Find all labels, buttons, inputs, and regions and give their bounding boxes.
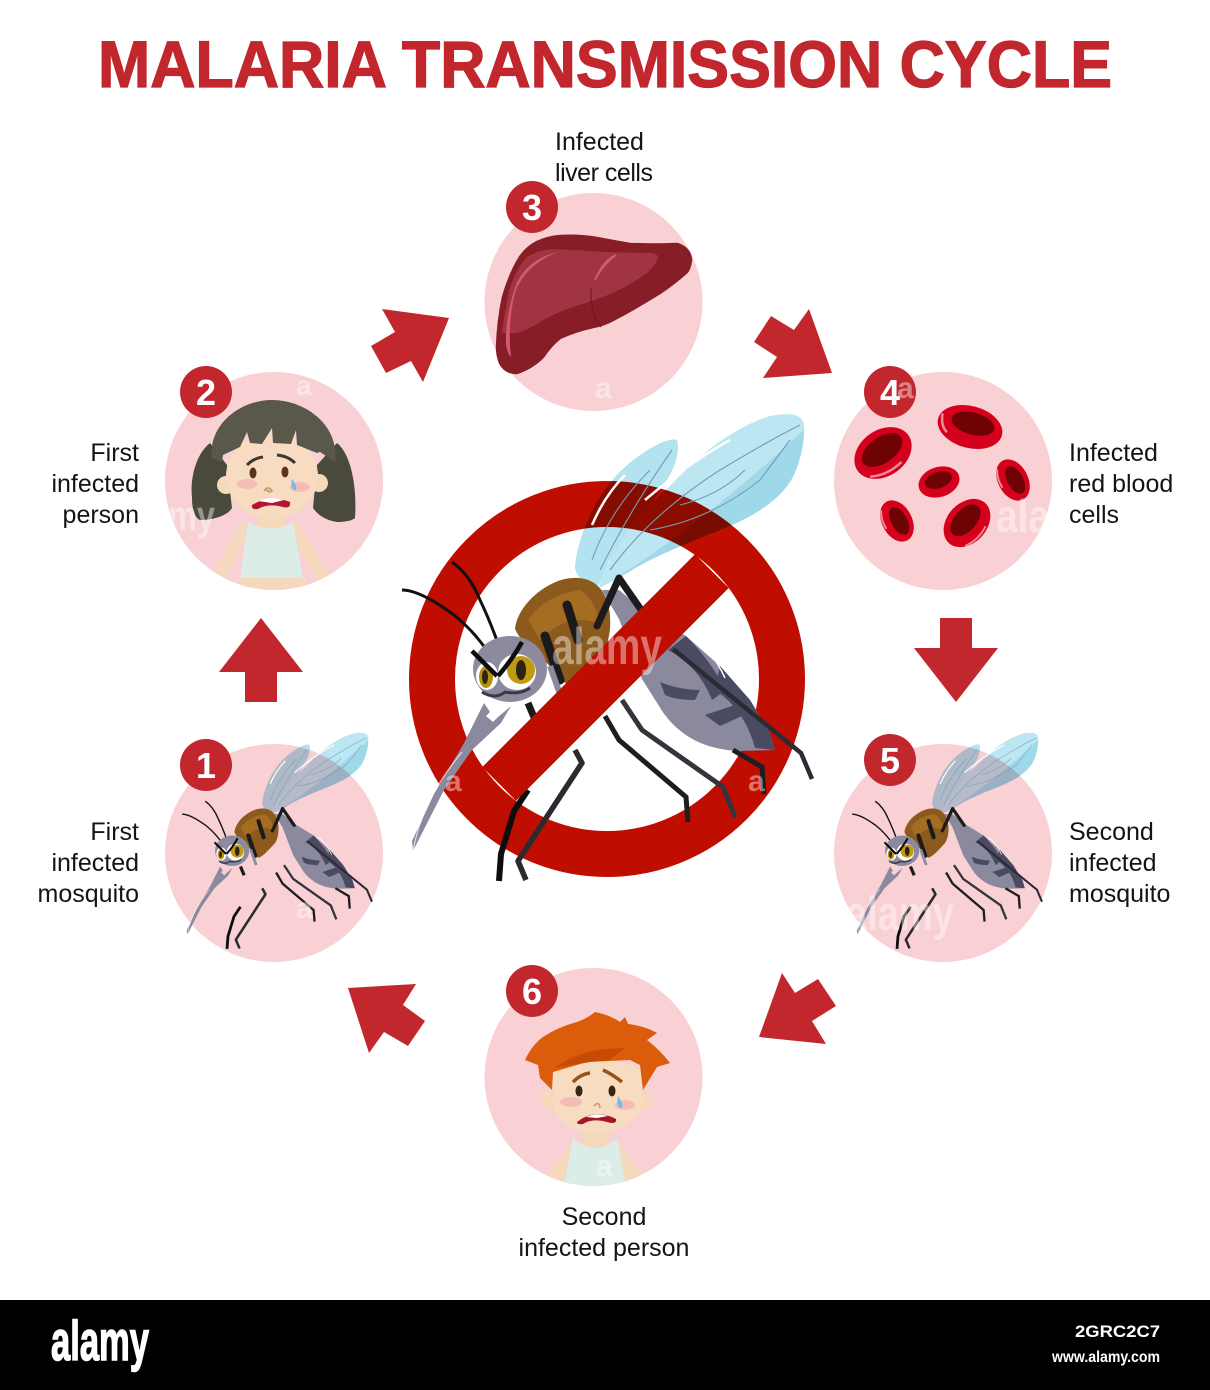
prohibition slash — [483, 555, 728, 800]
panel: step 6 second infected person — [484, 965, 702, 1190]
label: second infected person: infected person — [519, 1234, 689, 1262]
arrow: 1 to 2 — [219, 618, 303, 702]
icon: crying boy — [525, 1012, 670, 1190]
site url: www.alamy.com — [1051, 1349, 1160, 1366]
footer logo: alamy — [51, 1309, 149, 1372]
watermark: alamy — [552, 618, 662, 676]
badge 3: 3 — [522, 187, 542, 228]
panel: step 5 second infected mosquito — [834, 733, 1052, 962]
watermark: a — [445, 765, 462, 798]
badge 2: 2 — [196, 372, 216, 413]
label: second infected mosquito: infected — [1069, 849, 1157, 877]
label: infected red blood cells: cells — [1069, 501, 1119, 529]
arrow: 3 to 4 — [754, 309, 832, 378]
icon: large mosquito — [402, 414, 812, 881]
arrow: 5 to 6 — [759, 973, 836, 1044]
image id: 2GRC2C7 — [1075, 1322, 1160, 1341]
title: MALARIA TRANSMISSION CYCLE — [98, 27, 1112, 101]
icon: liver — [497, 236, 691, 405]
badge 4 — [864, 366, 916, 418]
no-entry ring — [432, 504, 782, 854]
badge 4: 4 — [880, 372, 900, 413]
icon: red blood cell — [844, 416, 922, 490]
icon: small mosquito 1 — [182, 733, 372, 949]
watermark: a — [296, 892, 313, 925]
label: second infected mosquito: Second — [1069, 818, 1154, 846]
label: first infected mosquito: infected — [51, 849, 139, 877]
central prohibition sign with mosquito — [402, 414, 812, 881]
label: second infected mosquito: mosquito — [1069, 880, 1170, 908]
badge 2 — [180, 366, 232, 418]
badge 6: 6 — [522, 971, 542, 1012]
label: first infected person: First — [90, 439, 139, 467]
label: infected liver cells: liver cells — [555, 159, 653, 187]
icon: crying girl — [168, 370, 355, 592]
label: first infected person: person — [63, 501, 139, 529]
arrow: 4 to 5 — [914, 618, 998, 702]
label: infected red blood cells: red blood — [1069, 470, 1173, 498]
badge 6 — [506, 965, 558, 1017]
watermark: my — [168, 492, 215, 539]
watermark: ala — [996, 490, 1050, 542]
badge 1 — [180, 739, 232, 791]
panel: step 2 first infected person — [165, 366, 383, 592]
badge 3 — [506, 181, 558, 233]
badge 5 — [864, 734, 916, 786]
footer bar — [0, 1300, 1210, 1390]
arrow: 6 to 1 — [348, 984, 425, 1053]
icon: small mosquito 5 — [852, 733, 1042, 949]
icon: red blood cell — [914, 461, 964, 503]
watermark: a — [748, 765, 765, 798]
label: first infected person: infected — [51, 470, 139, 498]
icon: red blood cell — [933, 398, 1007, 456]
panel: step 1 first infected mosquito — [165, 733, 383, 962]
label: second infected person: Second — [562, 1203, 646, 1231]
badge 4: a — [897, 372, 914, 405]
watermark: a — [595, 372, 612, 405]
watermark: alamy — [846, 888, 954, 941]
badge 1: 1 — [196, 745, 216, 786]
label: infected red blood cells: Infected — [1069, 439, 1158, 467]
label: first infected mosquito: First — [90, 818, 139, 846]
label: infected liver cells: Infected — [555, 128, 644, 156]
icon: red blood cell — [989, 454, 1037, 506]
label: first infected mosquito: mosquito — [38, 880, 139, 908]
panel: step 3 infected liver cells — [484, 181, 702, 411]
watermark: a — [596, 1150, 613, 1183]
arrow: 2 to 3 — [371, 309, 449, 382]
icon: crying girl: a — [296, 370, 312, 401]
badge 5: 5 — [880, 740, 900, 781]
icon: red blood cell — [873, 495, 921, 547]
icon: red blood cell — [934, 490, 1000, 556]
panel: step 4 infected red blood cells — [834, 366, 1052, 590]
